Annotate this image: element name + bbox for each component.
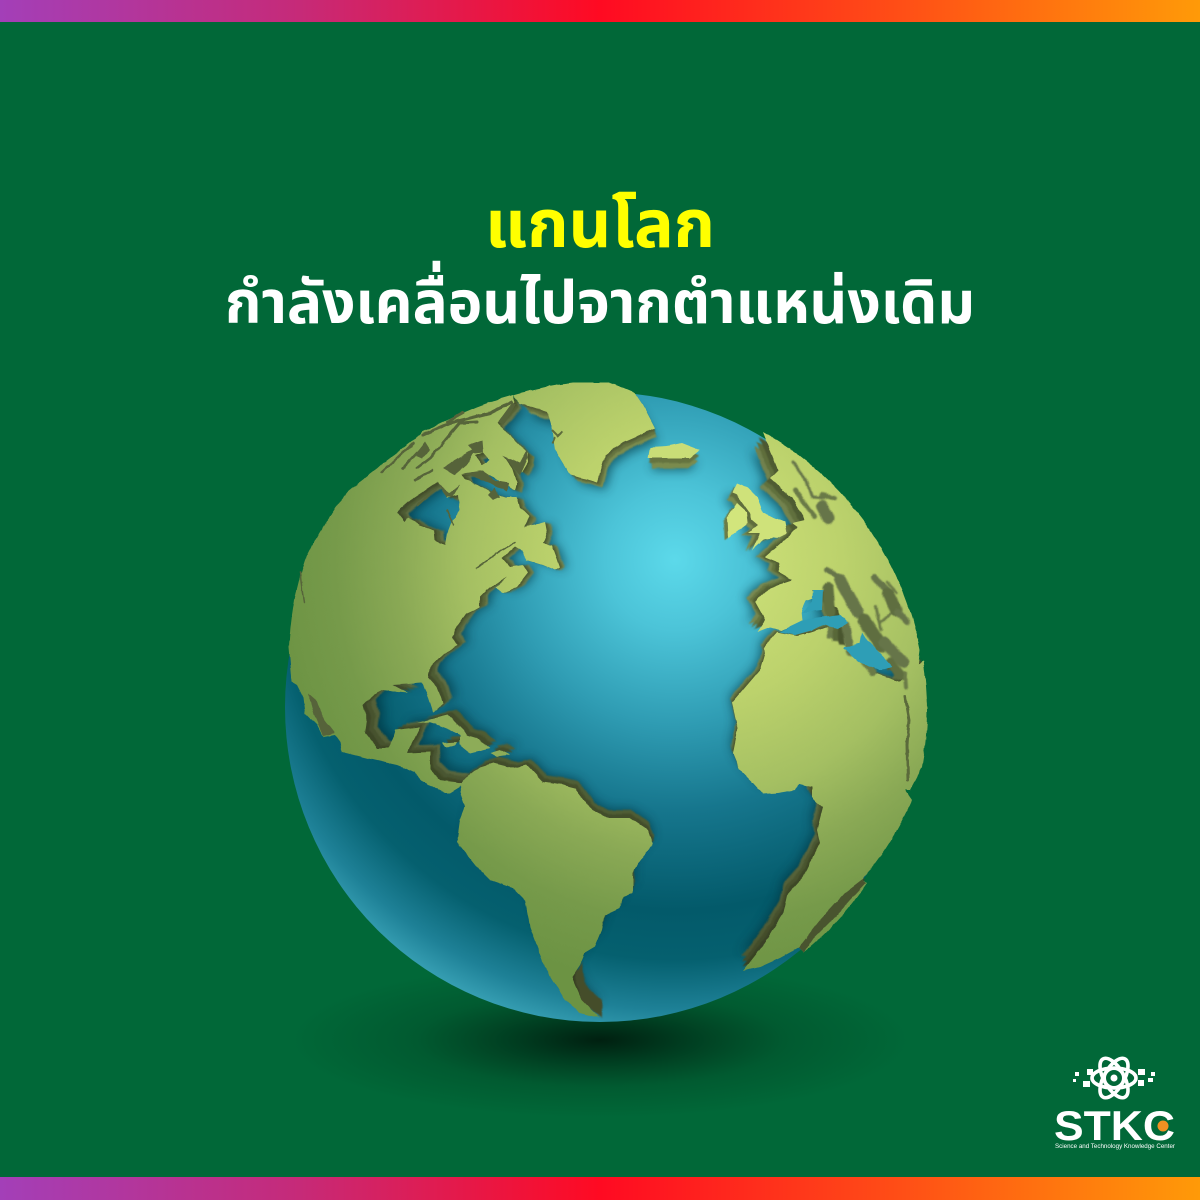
- globe: [285, 383, 927, 1022]
- cast shadows of continents on ocean: [376, 404, 894, 998]
- continent: Great Britain: [727, 483, 787, 551]
- logo wordmark: STKC: [1054, 1102, 1175, 1149]
- continent: North America: [289, 395, 565, 793]
- inland seas and mountain walls: [793, 462, 907, 688]
- continent: Iceland: [648, 443, 700, 468]
- top gradient bar: [0, 0, 1200, 22]
- continent: Africa: [730, 625, 927, 971]
- continent: South America: [457, 757, 654, 1018]
- title line 1: yellow: แกนโลก: [485, 187, 715, 262]
- bottom gradient bar: [0, 1177, 1200, 1200]
- logo subtitle: Science and Technology Knowledge Center: [1055, 1144, 1175, 1150]
- continent: Greenland: [513, 383, 657, 487]
- title line 2: white: กำลังเคลื่อนไปจากตำแหน่งเดิม: [225, 260, 975, 336]
- logo: STKC: [1054, 1054, 1175, 1150]
- blue sea patches: [780, 590, 893, 670]
- continent: Caribbean islands: [417, 710, 516, 757]
- ocean sphere: [285, 392, 915, 1022]
- logo orange dot: [1158, 1120, 1168, 1132]
- icon: atom: [1092, 1054, 1136, 1102]
- continents layer: [289, 383, 927, 1018]
- continent: Ireland: [723, 503, 748, 540]
- icon: pixel squares: [1073, 1069, 1155, 1087]
- ground shadow under globe: [290, 962, 910, 1118]
- title: [225, 187, 975, 336]
- continent: Eurasia: [747, 432, 920, 688]
